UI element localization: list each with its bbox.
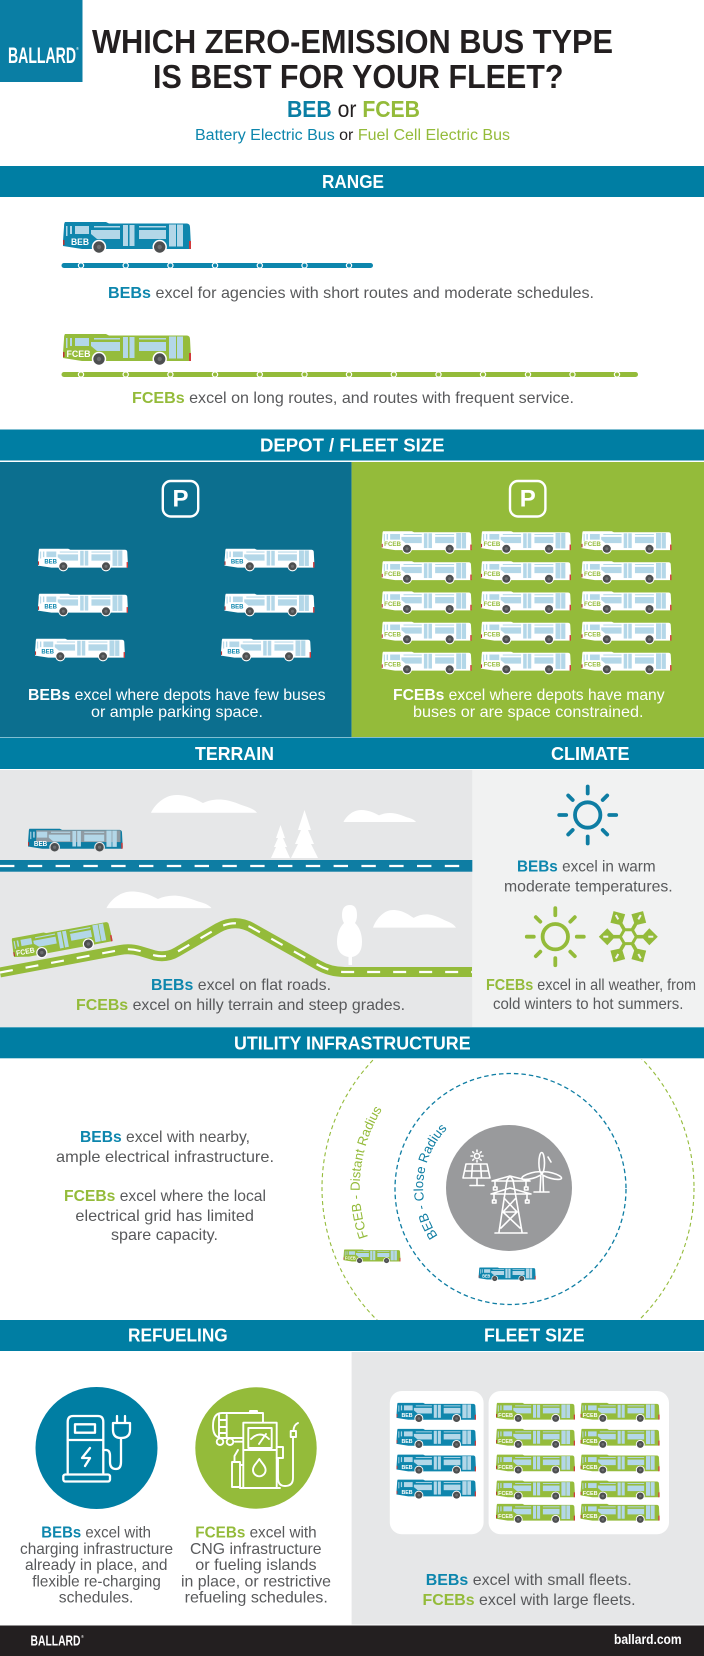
footer: ® (81, 1634, 84, 1639)
bus: BEB on flat road: BEB (34, 841, 47, 848)
bus: FCEB distant (344, 1249, 400, 1264)
text: FCEB refueling: FCEBs excel with (195, 1525, 317, 1542)
text: BEB refueling: already in place, and (25, 1557, 168, 1574)
icon: parking FCEB (510, 481, 545, 516)
card: large FCEB fleet: FCEB (498, 1514, 513, 1520)
heading bar: terrain and climate (0, 738, 704, 769)
text: BEB climate (504, 859, 673, 896)
text: FCEB refueling: refueling schedules. (185, 1590, 328, 1607)
footer: BALLARD (30, 1634, 80, 1650)
logo: Ballard (0, 0, 82, 82)
subtitle: full names: Battery Electric Bus or Fuel Cell Electric Bus (195, 127, 510, 144)
bus: FCEB distant: FCEB (345, 1256, 356, 1261)
text: fleet size (422, 1572, 636, 1609)
icon: sun FCEB (527, 908, 584, 965)
subtitle: BEB or FCEB: BEB or FCEB (287, 96, 420, 122)
bus: FCEB on hill (11, 920, 113, 963)
panel: refueling (20, 1387, 331, 1607)
card: small BEB fleet: BEB (401, 1465, 413, 1471)
text: terrain: FCEBs excel on hilly terrain and steep grades. (76, 997, 405, 1014)
text: BEB depot: BEBs excel where depots have few buses (28, 687, 326, 704)
buses: many FCEB: FCEB (483, 571, 501, 578)
text: utility BEB: ample electrical infrastructure. (56, 1149, 274, 1166)
card: large FCEB fleet: FCEB (583, 1491, 598, 1497)
card: large FCEB fleet: FCEB (583, 1439, 598, 1445)
heading bar: range (0, 166, 704, 197)
footer: ballard.com (614, 1631, 682, 1647)
buses: many FCEB: FCEB (483, 631, 501, 638)
text: FCEB refueling: CNG infrastructure (190, 1541, 322, 1558)
heading bar: range: RANGE (322, 171, 384, 192)
card: large FCEB fleet (489, 1391, 669, 1534)
panel: fleet size (352, 1352, 704, 1624)
buses: many FCEB: FCEB (483, 541, 501, 548)
panel: FCEB depot (352, 462, 704, 737)
buses: few BEB: BEB (41, 648, 54, 655)
card: large FCEB fleet: FCEB (498, 1491, 513, 1497)
label: FCEB distant radius: FCEB - Distant Radius (350, 1107, 382, 1239)
radius: BEB close (395, 1074, 626, 1304)
heading bar: terrain and climate: CLIMATE (551, 743, 630, 764)
bus: BEB close: BEB (482, 1274, 490, 1279)
heading bar: refueling and fleet size (0, 1320, 704, 1351)
text: FCEB refueling: or fueling islands (195, 1557, 317, 1574)
buses: many FCEB (382, 531, 671, 674)
icon: parking BEB: P (172, 486, 189, 512)
text: BEB refueling: BEBs excel with (41, 1525, 151, 1542)
text: fleet size: FCEBs excel with large fleets. (422, 1592, 636, 1609)
bus: FCEB range: FCEB (66, 349, 91, 360)
buses: many FCEB: FCEB (384, 541, 401, 548)
text: utility BEB (56, 1129, 274, 1166)
footer (0, 1626, 704, 1656)
buses: few BEB: BEB (44, 558, 57, 565)
card: large FCEB fleet: FCEB (498, 1413, 513, 1419)
bus: FCEB on hill: FCEB (15, 945, 36, 958)
buses: many FCEB: FCEB (483, 661, 501, 668)
title: IS BEST FOR YOUR FLEET? (153, 59, 564, 96)
buses: few BEB: BEB (231, 603, 244, 610)
text: BEB climate: moderate temperatures. (504, 879, 673, 896)
hilly road (0, 923, 472, 972)
icon: power sources (446, 1125, 572, 1251)
route line: FCEB long (62, 372, 638, 377)
panel: terrain (0, 770, 472, 1027)
text: BEB refueling: charging infrastructure (20, 1541, 173, 1558)
text: utility FCEB: electrical grid has limited (75, 1208, 254, 1225)
section: range (0, 166, 704, 407)
text: terrain: BEBs excel on flat roads. (151, 977, 331, 994)
title (92, 24, 613, 96)
buses: many FCEB: FCEB (384, 601, 401, 608)
buses: many FCEB: FCEB (384, 631, 401, 638)
logo: Ballard: BALLARD (8, 43, 76, 68)
bus: FCEB range (63, 334, 191, 366)
buses: many FCEB: FCEB (584, 571, 601, 578)
text: BEB depot: or ample parking space. (91, 704, 263, 721)
card: large FCEB fleet: FCEB (583, 1413, 598, 1419)
bus: BEB close (479, 1267, 536, 1282)
heading bar: depot: DEPOT / FLEET SIZE (260, 435, 444, 456)
card: small BEB fleet (390, 1391, 484, 1534)
clouds and trees (106, 795, 456, 965)
bus: BEB range: BEB (71, 237, 89, 248)
text: BEB refueling (20, 1525, 173, 1607)
flat road (0, 860, 472, 872)
panel: climate (472, 770, 704, 1027)
text: utility FCEB (64, 1188, 266, 1244)
heading bar: terrain and climate: TERRAIN (195, 743, 274, 764)
icon: parking BEB (163, 481, 198, 516)
buses: few BEB (35, 549, 314, 661)
label: BEB close radius: BEB - Close Radius (414, 1125, 446, 1240)
bus: BEB on flat road (28, 829, 123, 853)
text: BEB depot (28, 687, 326, 721)
icon: parking FCEB: P (520, 486, 536, 512)
bus: BEB range (63, 222, 191, 254)
section: depot fleet size (0, 430, 704, 737)
buses: many FCEB: FCEB (483, 601, 501, 608)
text: FCEB depot: FCEBs excel where depots have many (393, 687, 665, 704)
text: FCEB depot (393, 687, 665, 721)
text: FCEB depot: buses or are space constrained. (413, 704, 644, 721)
buses: many FCEB: FCEB (584, 541, 601, 548)
text: FCEB refueling: in place, or restrictive (181, 1574, 331, 1590)
text: BEB climate: BEBs excel in warm (517, 859, 656, 876)
card: large FCEB fleet: FCEB (583, 1465, 598, 1471)
icon: snowflake (599, 907, 658, 966)
buses: few BEB: BEB (231, 558, 244, 565)
heading bar: utility: UTILITY INFRASTRUCTURE (234, 1032, 471, 1053)
text: FCEB climate: cold winters to hot summers. (493, 996, 683, 1013)
buses: many FCEB: FCEB (384, 571, 401, 578)
text: utility BEB: BEBs excel with nearby, (80, 1129, 250, 1146)
text: fleet size: BEBs excel with small fleets. (426, 1572, 632, 1589)
radius: FCEB distant (321, 1059, 695, 1320)
section: utility infrastructure (0, 1027, 704, 1320)
buses: many FCEB: FCEB (384, 661, 401, 668)
title: WHICH ZERO-EMISSION BUS TYPE (92, 24, 613, 61)
heading bar: utility (0, 1027, 704, 1058)
card: large FCEB fleet: FCEB (583, 1514, 598, 1520)
icon: fuel pump (195, 1387, 317, 1509)
text: utility FCEB: spare capacity. (111, 1227, 218, 1244)
card: large FCEB fleet: FCEB (498, 1439, 513, 1445)
icon: sun BEB (559, 786, 616, 844)
text: terrain (76, 977, 405, 1014)
text: BEB refueling: schedules. (59, 1590, 133, 1607)
text: FCEB range: FCEBs excel on long routes, and routes with frequent service. (132, 390, 574, 407)
text: BEB refueling: flexible re-charging (32, 1574, 161, 1590)
card: small BEB fleet: BEB (401, 1490, 413, 1496)
heading bar: depot (0, 430, 704, 460)
text: utility FCEB: FCEBs excel where the local (64, 1188, 266, 1205)
logo: Ballard: ® (76, 46, 79, 51)
text: FCEB climate (486, 977, 696, 1013)
icon: electric charger (36, 1387, 158, 1509)
buses: few BEB: BEB (44, 603, 57, 610)
text: BEB range: BEBs excel for agencies with short routes and moderate schedules. (108, 285, 594, 302)
text: FCEB refueling (181, 1525, 331, 1607)
panel: BEB depot (0, 462, 352, 737)
buses: few BEB: BEB (227, 648, 240, 655)
heading bar: refueling and fleet size: REFUELING (128, 1325, 228, 1346)
card: large FCEB fleet: FCEB (498, 1465, 513, 1471)
heading bar: refueling and fleet size: FLEET SIZE (484, 1325, 585, 1346)
card: small BEB fleet: BEB (401, 1439, 413, 1445)
buses: many FCEB: FCEB (584, 661, 601, 668)
buses: many FCEB: FCEB (584, 601, 601, 608)
buses: many FCEB: FCEB (584, 631, 601, 638)
card: small BEB fleet: BEB (401, 1413, 413, 1419)
route line: BEB short (62, 263, 373, 268)
